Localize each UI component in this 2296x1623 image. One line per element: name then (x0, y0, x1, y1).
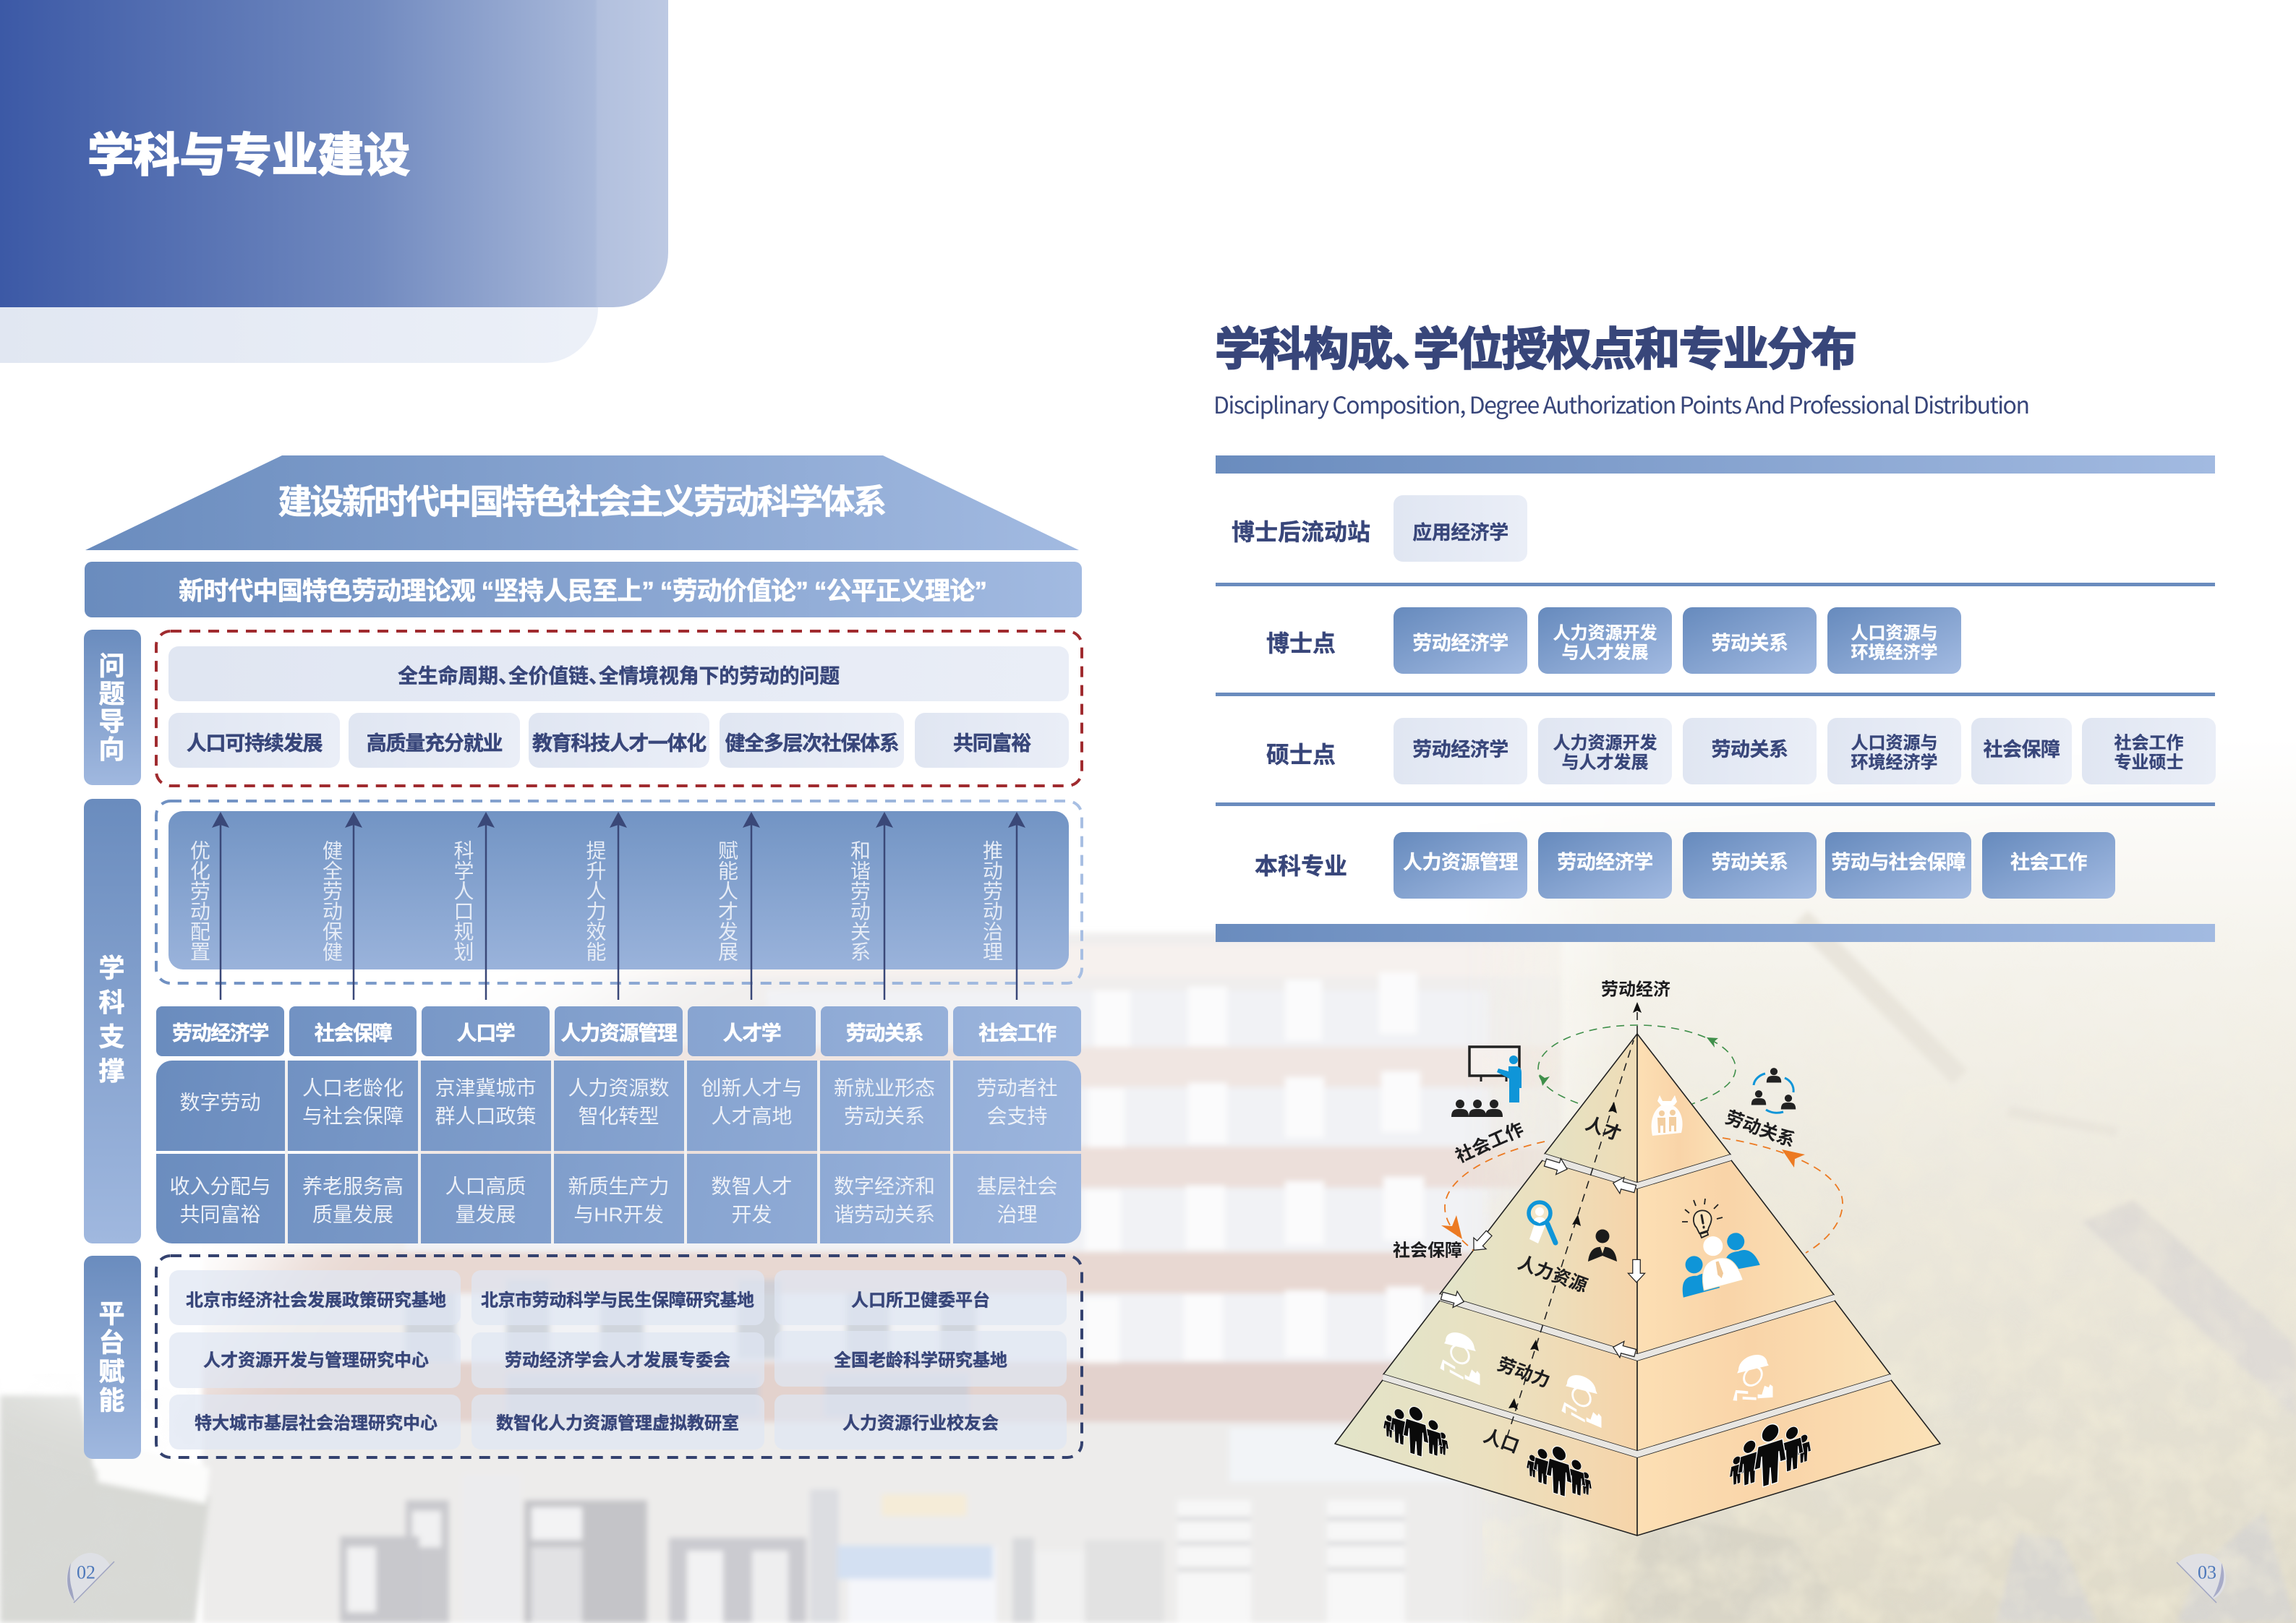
page number 03 (2177, 1554, 2226, 1603)
pyramid labels: 劳动力 (1495, 1354, 1553, 1392)
goals panel: 优化劳动配置 (188, 840, 210, 962)
goals panel: 科学人口规划 (451, 840, 474, 962)
goals panel: 和谐劳动关系 (848, 840, 871, 962)
research topics grid: 数字劳动 (179, 1092, 261, 1113)
research topics grid: 智化转型 (578, 1105, 660, 1128)
research topics grid: 群人口政策 (435, 1105, 537, 1128)
row: 本科专业: 劳动经济学 (1557, 852, 1653, 873)
pyramid body (1335, 1034, 1940, 1536)
panel: 学科支撑 (84, 799, 1082, 1243)
discipline headers: 人口学 (457, 1022, 515, 1044)
icon: team with idea bulb (1670, 1199, 1763, 1298)
pyramid diagram (1335, 980, 1940, 1536)
ascending dashed axis (1507, 1002, 1642, 1437)
right heading (1213, 325, 2030, 421)
discipline headers: 劳动经济学 (172, 1022, 268, 1044)
row: 硕士点: 社会保障 (1983, 739, 2060, 761)
side label 平台赋能: 平台赋能 (95, 1300, 124, 1416)
row: 博士后流动站: 应用经济学 (1412, 522, 1508, 544)
icon: labour relations cycle (1751, 1068, 1796, 1113)
blue dashed frame (156, 801, 1082, 983)
row: 本科专业: 人力资源管理 (1403, 852, 1518, 873)
pyramid labels: 人力资源 (1515, 1253, 1590, 1296)
goals panel: 健全劳动保健 (320, 840, 343, 962)
platform cards: 人力资源行业校友会 (842, 1414, 999, 1433)
platform cards: 数智化人力资源管理虚拟教研室 (496, 1413, 739, 1433)
research topics grid (156, 1061, 1081, 1243)
platform cards: 人口所卫健委平台 (851, 1290, 990, 1310)
icon: workers (1440, 1328, 1773, 1428)
header banner: 学科与专业建设 (0, 0, 668, 363)
row: 本科专业: 社会工作 (2010, 852, 2087, 873)
platform cards: 劳动经济学会人才发展专委会 (505, 1350, 730, 1371)
discipline headers: 劳动关系 (846, 1022, 923, 1044)
platform cards (169, 1270, 1067, 1449)
problem statement (168, 646, 1069, 701)
pyramid labels: 劳动关系 (1723, 1108, 1798, 1151)
page number 02: 02 (77, 1562, 95, 1583)
row: 博士点: 劳动关系 (1711, 633, 1788, 654)
table: degree distribution (1216, 455, 2216, 942)
research topics grid: 与HR开发 (573, 1203, 664, 1226)
roof: discipline system heading (85, 455, 1079, 550)
research topics grid: 基层社会 (976, 1176, 1058, 1197)
icon: talent (1652, 1095, 1683, 1136)
right heading: 学科构成、学位授权点和专业分布 (1215, 325, 1857, 375)
research topics grid: 开发 (731, 1203, 772, 1226)
goals panel (168, 811, 1069, 969)
side label 问题导向: 问题导向 (95, 652, 124, 763)
pyramid labels (1393, 980, 1798, 1457)
research topics grid: 量发展 (455, 1203, 516, 1226)
goals panel: 推动劳动治理 (981, 840, 1003, 962)
research topics grid: 人力资源数 (568, 1077, 670, 1099)
research topics grid: 养老服务高 (302, 1176, 404, 1197)
goals panel: 赋能人才发展 (716, 840, 738, 962)
research topics grid: 质量发展 (312, 1203, 393, 1226)
pyramid labels: 劳动经济 (1601, 980, 1670, 999)
theory banner (85, 562, 1082, 617)
icon: crowds (1383, 1396, 1811, 1505)
research topics grid: 劳动者社 (976, 1077, 1058, 1099)
background photo: faded campus building and trees (0, 832, 2296, 1623)
platform cards: 北京市劳动科学与民生保障研究基地 (481, 1291, 754, 1310)
row: 博士点 (1266, 607, 1961, 674)
research topics grid: 治理 (997, 1203, 1038, 1226)
band dividers (1383, 1154, 1891, 1457)
row: 本科专业: 劳动与社会保障 (1831, 852, 1966, 873)
problem statement: 全生命周期、全价值链、全情境视角下的劳动的问题 (398, 664, 840, 687)
research topics grid: 人口高质 (445, 1176, 526, 1197)
row: 本科专业 (1255, 832, 2115, 899)
side label 学科支撑: 学科支撑 (95, 954, 124, 1092)
row: 本科专业: 本科专业 (1255, 853, 1347, 879)
research topics grid: 与社会保障 (302, 1105, 404, 1128)
issue cards: 教育科技人才一体化 (532, 732, 707, 755)
row: 硕士点: 专业硕士 (2114, 753, 2184, 772)
side label 平台赋能 (84, 1256, 141, 1459)
row: 博士点: 环境经济学 (1851, 643, 1938, 662)
platform cards: 全国老龄科学研究基地 (834, 1350, 1007, 1371)
page title: 学科与专业建设 (88, 129, 410, 181)
row: 硕士点: 与人才发展 (1562, 753, 1649, 772)
discipline headers: 社会工作 (978, 1022, 1057, 1044)
research topics grid: 数字经济和 (834, 1176, 935, 1197)
goals panel: 提升人力效能 (584, 840, 606, 962)
research topics grid: 劳动关系 (844, 1105, 925, 1128)
row: 硕士点: 劳动经济学 (1412, 739, 1508, 761)
row: 博士后流动站 (1232, 495, 1527, 562)
row: 硕士点: 环境经济学 (1851, 753, 1938, 772)
orange arcs (1441, 1138, 1843, 1253)
platform cards: 特大城市基层社会治理研究中心 (195, 1413, 438, 1433)
platform cards: 北京市经济社会发展政策研究基地 (186, 1291, 446, 1310)
red dashed frame (156, 631, 1082, 786)
research topics grid: 新就业形态 (834, 1077, 935, 1099)
upward arrows (212, 812, 1025, 1000)
research topics grid: 共同富裕 (179, 1203, 261, 1226)
page number 03: 03 (2198, 1562, 2216, 1583)
row: 硕士点: 劳动关系 (1711, 739, 1788, 761)
page number 02 (67, 1553, 114, 1603)
row: 硕士点: 社会工作 (2114, 733, 2184, 753)
research topics grid: 收入分配与 (169, 1176, 271, 1197)
pyramid labels: 社会保障 (1393, 1241, 1462, 1261)
icon: presenter and audience (1451, 1047, 1522, 1117)
issue cards (168, 713, 1069, 768)
discipline headers: 人才学 (723, 1022, 781, 1044)
table rules (1216, 455, 2215, 942)
row: 硕士点: 人力资源开发 (1553, 733, 1657, 753)
row: 博士点: 劳动经济学 (1412, 633, 1508, 654)
research topics grid: 数智人才 (711, 1176, 793, 1197)
discipline headers: 社会保障 (315, 1022, 392, 1044)
research topics grid: 人才高地 (711, 1105, 793, 1128)
row: 硕士点: 人口资源与 (1851, 733, 1938, 753)
pyramid labels: 人口 (1481, 1426, 1522, 1457)
english subtitle: Disciplinary Composition, Degree Authorization Points And Professional Distribution (1213, 387, 2030, 421)
icon: magnifier (1529, 1202, 1555, 1243)
row: 博士点: 博士点 (1266, 630, 1336, 656)
pyramid labels: 人才 (1583, 1113, 1623, 1145)
research topics grid: 会支持 (986, 1105, 1048, 1128)
issue cards: 高质量充分就业 (367, 732, 502, 755)
navy dashed frame (156, 1256, 1082, 1457)
issue cards: 共同富裕 (953, 732, 1031, 755)
research topics grid: 创新人才与 (701, 1077, 803, 1099)
issue cards: 健全多层次社保体系 (725, 732, 899, 755)
discipline headers (156, 1006, 1081, 1056)
side label 学科支撑 (84, 799, 141, 1243)
row: 博士点: 人口资源与 (1851, 623, 1938, 643)
theory banner: 新时代中国特色劳动理论观 “坚持人民至上” “劳动价值论” “公平正义理论” (179, 577, 987, 606)
research topics grid: 京津冀城市 (435, 1077, 537, 1099)
panel: 平台赋能 (84, 1256, 1082, 1459)
roof: discipline system heading: 建设新时代中国特色社会主义劳动科学体系 (278, 483, 887, 521)
issue cards: 人口可持续发展 (187, 732, 323, 755)
discipline headers: 人力资源管理 (561, 1022, 678, 1044)
panel: 问题导向 (84, 630, 1082, 786)
row: 硕士点: 硕士点 (1266, 742, 1336, 768)
research topics grid: 谐劳动关系 (834, 1203, 935, 1226)
research topics grid: 新质生产力 (568, 1176, 670, 1197)
platform cards: 人才资源开发与管理研究中心 (203, 1350, 429, 1371)
row: 博士点: 人力资源开发 (1553, 623, 1657, 643)
side label 问题导向 (84, 630, 141, 785)
research topics grid: 人口老龄化 (302, 1077, 404, 1099)
row: 本科专业: 劳动关系 (1711, 852, 1788, 873)
pyramid labels: 社会工作 (1453, 1119, 1527, 1167)
row: 博士点: 与人才发展 (1562, 643, 1649, 662)
icon: manager (1588, 1229, 1617, 1262)
row: 硕士点 (1266, 718, 2216, 784)
row: 博士后流动站: 博士后流动站 (1232, 519, 1370, 545)
small white flow arrows (1440, 1155, 1645, 1361)
green cycle arcs (1538, 1025, 1736, 1104)
